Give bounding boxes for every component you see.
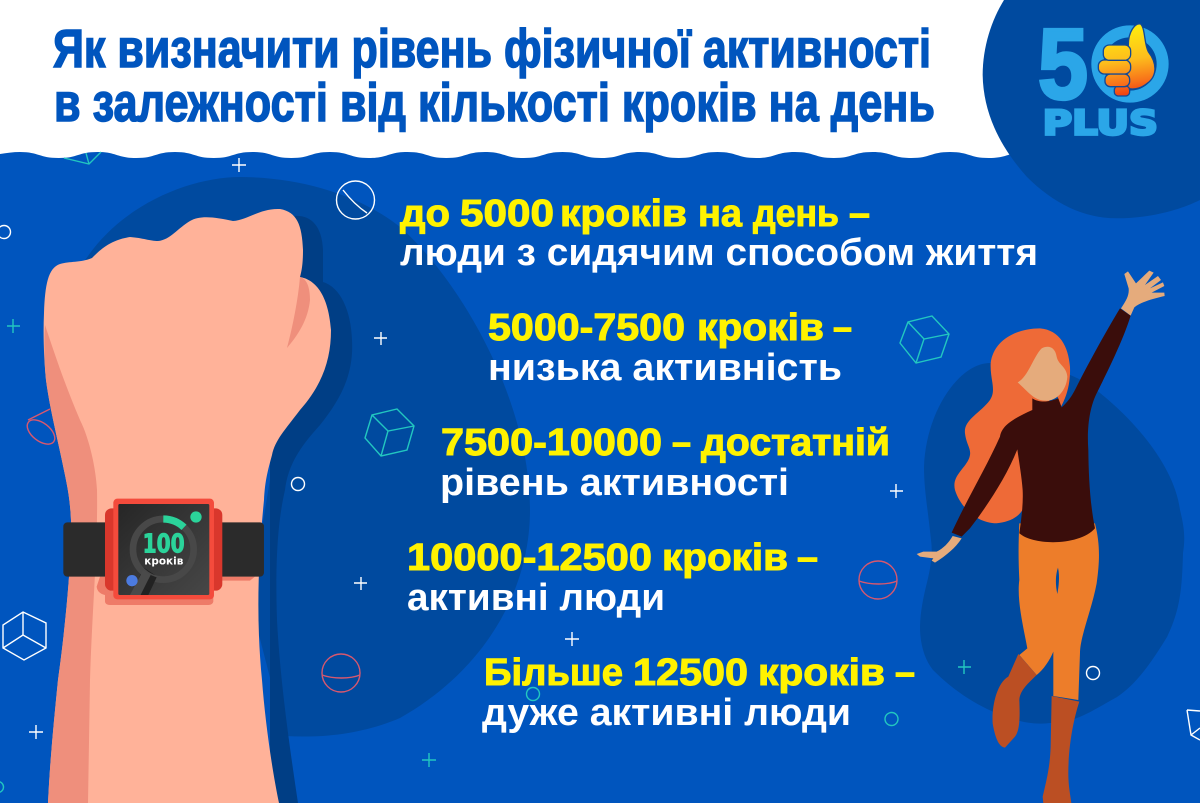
text block: up to 5000: 5000 xyxy=(460,193,554,235)
watch shadow xyxy=(97,577,255,605)
text block: up to 5000: люди з сидячим способом життя xyxy=(400,232,1038,274)
arm side shading xyxy=(44,325,97,803)
text block: 5000-7500: – xyxy=(833,307,852,349)
text block: over 12500: дуже активні люди xyxy=(482,692,851,734)
arm shadow xyxy=(270,216,352,803)
text block: 7500-10000: рівень активності xyxy=(440,462,789,504)
text block: over 12500: – xyxy=(895,652,915,694)
decorative shapes xyxy=(0,152,1200,792)
logo word PLUS: PLUS xyxy=(1043,104,1158,144)
dark blob behind arm xyxy=(84,177,530,737)
raised hand xyxy=(1121,271,1165,316)
text block: up to 5000 xyxy=(400,193,1038,274)
case sides xyxy=(105,508,222,591)
smartwatch xyxy=(63,499,264,605)
blue dot xyxy=(126,575,138,586)
thumb crease xyxy=(287,277,310,348)
step count: 100 xyxy=(143,529,185,559)
text block: up to 5000: на xyxy=(698,193,743,235)
text block: up to 5000: кроків xyxy=(560,193,687,235)
text block: 10000-12500 xyxy=(407,537,818,619)
hair xyxy=(954,328,1070,523)
text block: 5000-7500 xyxy=(488,307,852,389)
leg gap xyxy=(1056,568,1059,594)
face xyxy=(1018,347,1067,401)
text block: 10000-12500: активні люди xyxy=(407,577,665,619)
title: Як визначити рівень фізичної активності xyxy=(53,19,931,79)
arm with fist xyxy=(44,209,352,803)
text block: 7500-10000 xyxy=(440,422,890,504)
text block: 10000-12500: кроків xyxy=(662,537,788,579)
text block: over 12500: Більше xyxy=(484,652,623,694)
text block: 7500-10000: – xyxy=(672,422,691,464)
woman upper body xyxy=(952,271,1165,542)
hands xyxy=(132,567,155,595)
text block: 5000-7500: 5000-7500 xyxy=(488,307,685,349)
title: в залежності від кількості кроків на день xyxy=(54,73,935,133)
title xyxy=(53,19,935,133)
text block: 5000-7500: низька активність xyxy=(488,347,842,389)
text block: 10000-12500: 10000-12500 xyxy=(407,537,652,579)
text block: 5000-7500: кроків xyxy=(697,307,824,349)
steps label: кроків xyxy=(144,555,184,567)
lower hand xyxy=(917,536,962,563)
dark blob behind woman xyxy=(920,363,1184,724)
text block: 10000-12500: – xyxy=(797,537,818,579)
text block: 7500-10000: достатній xyxy=(701,422,890,464)
text block: 7500-10000: 7500-10000 xyxy=(441,422,662,464)
bent leg boot xyxy=(993,654,1037,748)
text block: over 12500: 12500 xyxy=(633,652,748,694)
text block: up to 5000: – xyxy=(849,193,870,235)
logo digit 5: 5 xyxy=(1038,9,1088,121)
white wavy header area xyxy=(0,0,1105,158)
text block: up to 5000: день xyxy=(753,193,839,235)
green dot xyxy=(190,511,202,523)
standing leg boot xyxy=(1043,696,1079,803)
logo thumb xyxy=(1098,24,1155,96)
text block: over 12500 xyxy=(482,652,915,734)
logo ring zero xyxy=(1097,31,1163,97)
woman lower body xyxy=(917,523,1099,803)
bezel xyxy=(113,499,214,599)
progress arc xyxy=(163,519,184,527)
arm skin xyxy=(44,209,331,803)
screen xyxy=(118,504,209,595)
leggings xyxy=(1019,523,1099,700)
logo badge xyxy=(983,0,1200,218)
text block: over 12500: кроків xyxy=(758,652,885,694)
text block: up to 5000: до xyxy=(400,193,450,235)
strap xyxy=(63,522,264,577)
torso and raised arm xyxy=(952,308,1131,542)
